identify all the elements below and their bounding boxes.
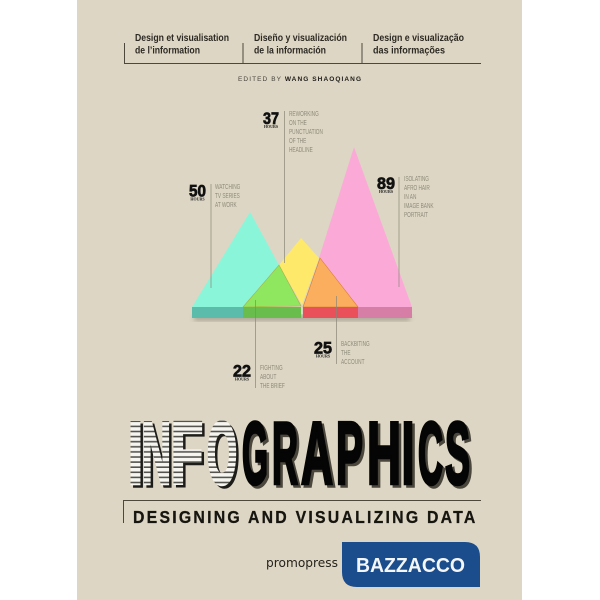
label: 89 hours: ISOLATING [404,176,429,183]
badge: Bazzacco: BAZZACCO [356,554,465,577]
title: GRAPHICS solid: I [402,403,414,502]
label: 89 hours [377,175,434,219]
title: GRAPHICS shadow: C [420,406,446,505]
label: 89 hours: IMAGE BANK [404,203,434,210]
title: GRAPHICS shadow: H [370,406,404,505]
title: INFO shadow: I [130,406,146,505]
label: 37 hours: ON THE [289,120,307,127]
triangle: teal 50 [192,212,279,318]
label: 89 hours: IN AN [404,194,416,201]
label: 37 hours [263,110,323,154]
label: 25 hours: THE [341,350,351,357]
title: INFO shadow: F [174,406,206,505]
title: GRAPHICS solid: P [336,403,363,502]
label: 50 hours: TV SERIES [215,193,240,200]
title: Portuguese: Design e visualização [373,32,464,44]
title: GRAPHICS shadow [244,406,472,505]
title: Spanish [254,32,347,56]
editor credit: EDITED BY WANG SHAOQIANG [238,76,362,83]
label: 22 hours: HOURS [235,376,250,382]
title: Portuguese [373,32,464,56]
label: 50 hours: WATCHING [215,184,241,191]
triangle chart [192,147,412,321]
publisher: promopress: promopress [266,556,338,570]
title: INFO shadow [130,406,240,505]
label: 50 hours: 50 [189,182,206,200]
title: GRAPHICS solid: A [301,403,333,502]
label: 22 hours [233,362,285,390]
header: language titles [124,32,481,64]
label: 50 hours: HOURS [190,196,205,202]
title: GRAPHICS solid: G [242,403,268,502]
label: 25 hours: BACKBITING [341,341,370,348]
triangle: yellow 37 [279,238,319,305]
title: INFO striped: F [171,403,203,502]
title: INFO shadow: N [144,406,174,505]
title: French [135,32,229,56]
label: 89 hours: 89 [377,175,395,193]
label: 50 hours: AT WORK [215,202,237,209]
label: 89 hours: HOURS [379,189,394,194]
label: 37 hours: HOURS [264,124,279,129]
badge: Bazzacco [342,542,480,587]
leader lines [211,111,399,388]
label: 89 hours: AFRO HAIR [404,185,430,192]
title: GRAPHICS shadow: R [274,406,300,505]
label: 89 hours: PORTRAIT [404,212,428,219]
main title [128,403,472,505]
label: 22 hours: 22 [233,362,251,380]
main title: O [210,406,240,505]
label: 25 hours: 25 [314,340,332,358]
title: INFO striped: N [142,403,171,502]
label: 22 hours: ABOUT [260,374,277,381]
title: Spanish: de la información [254,44,326,56]
title: Portuguese: das informações [373,44,445,56]
title: INFO striped: I [128,403,143,502]
title: INFO striped [128,403,237,502]
title: French: de l’information [135,44,200,56]
title: GRAPHICS solid: R [272,403,298,502]
label: 22 hours: THE BRIEF [260,383,285,390]
title: GRAPHICS shadow: P [338,406,366,505]
title: French: Design et visualisation [135,32,229,44]
label: 25 hours [314,340,370,366]
subtitle rule [124,500,481,523]
title: GRAPHICS solid [242,403,470,502]
title: GRAPHICS shadow: A [304,406,336,505]
label: 37 hours: REWORKING [289,111,319,118]
subtitle: DESIGNING AND VISUALIZING DATA [133,507,475,527]
chart shadow [194,315,410,321]
title: Spanish: Diseño y visualización [254,32,347,44]
title: GRAPHICS shadow: G [244,406,270,505]
main title: O [207,403,237,502]
triangle: orange 25 [303,258,358,318]
label: 37 hours: HEADLINE [289,147,313,154]
title: GRAPHICS shadow: I [404,406,417,505]
cover background [77,0,522,600]
triangle: pink 89 [319,147,412,318]
label: 22 hours: FIGHTING [260,365,283,372]
book cover: S [445,403,470,502]
label: 25 hours: HOURS [316,354,331,358]
title: GRAPHICS solid: C [418,403,443,502]
label: 50 hours [189,182,241,209]
triangle: green 22 [243,265,301,318]
label: 25 hours: ACCOUNT [341,359,365,366]
title: GRAPHICS solid: H [367,403,401,502]
label: 37 hours: OF THE [289,138,306,145]
book cover: S [448,406,472,505]
label: 37 hours: 37 [263,110,279,128]
label: 37 hours: PUNCTUATION [289,129,323,136]
